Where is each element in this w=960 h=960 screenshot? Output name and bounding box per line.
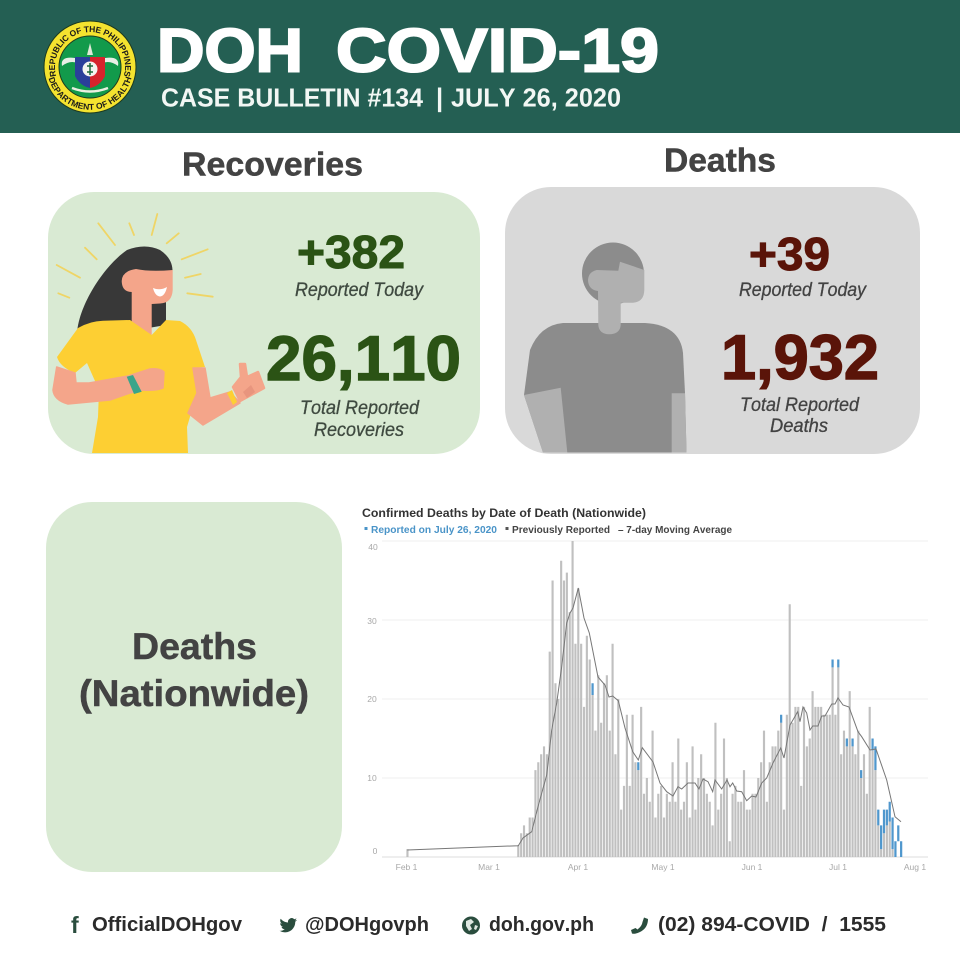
panel: recoveries	[48, 192, 480, 454]
deaths today figure: +39	[749, 228, 830, 280]
chart legend: Reported on July 26, 2020	[371, 525, 497, 536]
y axis labels: 0	[373, 846, 378, 856]
icon: Department of Health seal: DEPARTMENT OF HEALTH	[48, 76, 132, 110]
website: doh.gov.ph	[489, 914, 594, 936]
x axis labels: Mar 1	[478, 862, 500, 872]
heading: Recoveries: Recoveries	[182, 146, 363, 182]
recoveries total label: Recoveries	[314, 420, 404, 441]
header banner	[0, 0, 960, 133]
title: COVID-19	[336, 16, 659, 84]
deaths today label: Reported Today	[739, 280, 867, 301]
x axis labels: May 1	[651, 862, 675, 872]
recoveries today label: Reported Today	[295, 280, 424, 301]
line: 7-day moving average	[407, 588, 901, 850]
deaths total label: Deaths	[770, 416, 828, 437]
icon: facebook: f	[71, 912, 79, 938]
y axis labels	[367, 542, 378, 856]
x axis labels: Aug 1	[904, 862, 926, 872]
subtitle: JULY 26, 2020	[451, 84, 621, 112]
chart legend: – 7-day Moving Average	[618, 525, 732, 536]
subtitle	[161, 84, 621, 112]
icon: Department of Health seal: REPUBLIC OF THE PHILIPPINES	[49, 26, 131, 77]
y axis labels: 20	[367, 694, 377, 704]
recoveries today figure: +382	[297, 226, 405, 278]
chart title: Confirmed Deaths by Date of Death (Nationwide)	[362, 506, 646, 520]
icon: phone	[631, 918, 648, 934]
deaths total label: Total Reported	[740, 395, 860, 416]
subtitle: |	[436, 84, 443, 112]
deaths total figure: 1,932	[721, 323, 879, 393]
panel: deaths nationwide	[46, 502, 342, 872]
x axis labels: Apr 1	[568, 862, 588, 872]
x axis labels: Jul 1	[829, 862, 847, 872]
icon: celebrating woman	[53, 214, 264, 453]
chart legend: Previously Reported	[512, 525, 610, 536]
footer: contact details	[71, 912, 886, 938]
panel heading: (Nationwide)	[79, 673, 309, 714]
title	[157, 16, 659, 84]
facebook handle: OfficialDOHgov	[92, 914, 243, 936]
recoveries total label: Total Reported	[300, 398, 420, 419]
icon: twitter	[280, 918, 297, 932]
panel: deaths	[505, 187, 920, 454]
bars: reported on July 26, 2020	[593, 660, 901, 857]
recoveries total figure: 26,110	[266, 324, 461, 394]
chart: confirmed deaths by date of death	[362, 506, 928, 872]
icon: grey person	[524, 242, 686, 452]
y axis labels: 10	[367, 773, 377, 783]
heading: Deaths: Deaths	[664, 142, 776, 178]
y axis labels: 40	[368, 542, 378, 552]
panel heading: Deaths	[132, 626, 257, 667]
icon: Department of Health seal	[44, 20, 136, 114]
x axis labels: Feb 1	[396, 862, 418, 872]
x axis labels: Jun 1	[742, 862, 763, 872]
twitter handle: @DOHgovph	[305, 914, 429, 936]
title: DOH	[157, 16, 303, 84]
icon: globe	[462, 916, 480, 934]
chart legend	[364, 525, 732, 536]
hotline: (02) 894-COVID / 1555	[658, 914, 886, 936]
x axis labels	[396, 862, 926, 872]
y axis labels: 30	[367, 616, 377, 626]
subtitle: CASE BULLETIN #134	[161, 84, 424, 112]
bars: previously reported	[407, 541, 893, 857]
